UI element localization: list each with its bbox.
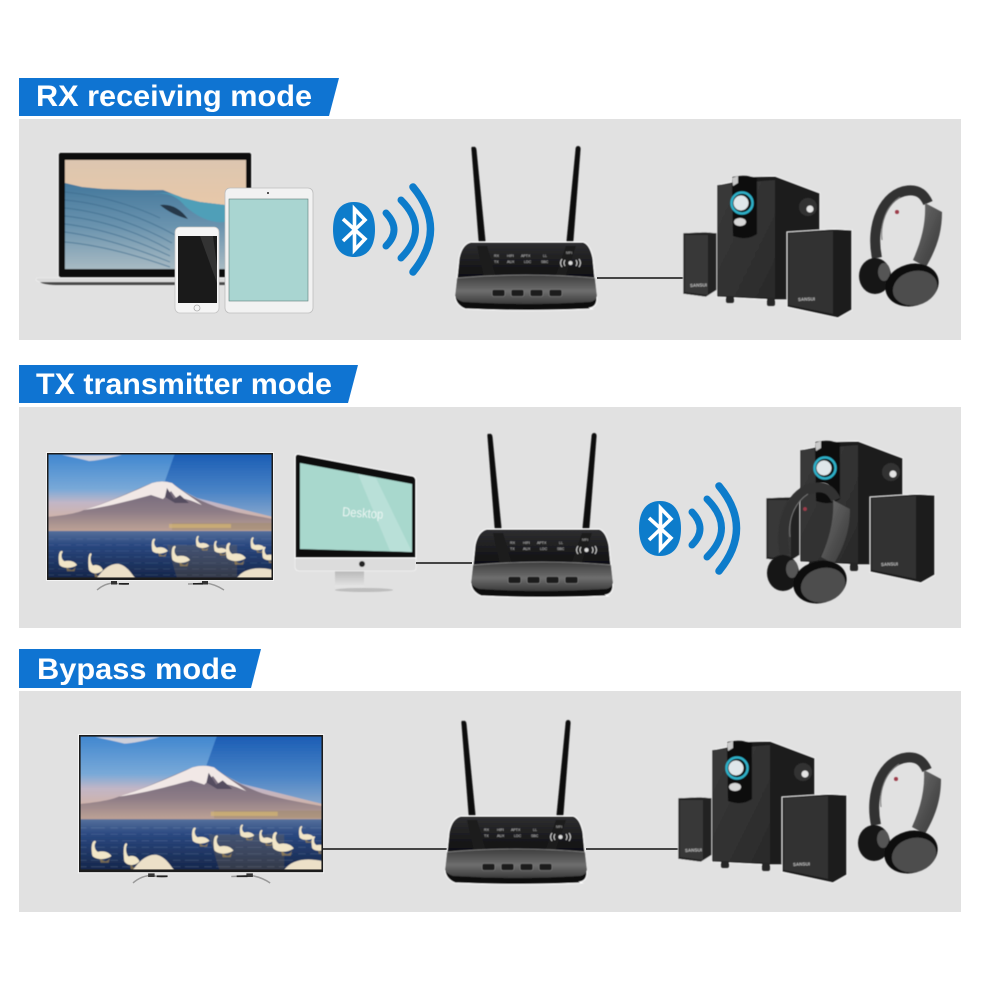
- icon: speakers: [683, 176, 852, 318]
- icon: speakers: SANSUI: [793, 861, 810, 867]
- icon: bluetooth waves: [639, 486, 736, 571]
- icon: bluetooth adapter: TX: [494, 260, 499, 264]
- icon: bluetooth adapter: SBC: [541, 260, 549, 264]
- icon: desktop computer: Desktop: [342, 504, 384, 522]
- cable: adapter to speakers: [597, 277, 684, 279]
- icon: bluetooth adapter: [445, 720, 587, 884]
- icon: bluetooth adapter: [455, 146, 597, 310]
- icon: speakers: SANSUI: [881, 561, 898, 567]
- icon: bluetooth adapter: MFi: [566, 251, 572, 255]
- icon: bluetooth adapter: APTX: [521, 254, 531, 258]
- icon: bluetooth adapter: RX: [494, 254, 500, 258]
- icon: bluetooth adapter: HIFI: [507, 254, 514, 258]
- heading: TX transmitter mode: TX transmitter mode: [36, 368, 332, 401]
- icon: headphones: [767, 487, 852, 609]
- icon: tablet: [225, 188, 313, 313]
- icon: bluetooth adapter: LL: [533, 828, 537, 832]
- icon: speakers: SANSUI: [690, 282, 707, 288]
- icon: bluetooth adapter: LL: [559, 541, 563, 545]
- icon: bluetooth adapter: RX: [510, 541, 516, 545]
- cable: adapter to speakers: [586, 848, 680, 850]
- heading: Bypass mode: Bypass mode: [37, 653, 237, 686]
- icon: bluetooth adapter: LDC: [540, 547, 548, 551]
- icon: bluetooth adapter: LDC: [514, 834, 522, 838]
- panel: TX transmitter mode: [19, 365, 961, 628]
- icon: bluetooth adapter: AUX: [507, 260, 515, 264]
- icon: bluetooth adapter: APTX: [537, 541, 547, 545]
- icon: bluetooth adapter: LL: [543, 254, 547, 258]
- heading: RX receiving mode: RX receiving mode: [36, 80, 312, 113]
- icon: phone: [175, 227, 219, 313]
- icon: speakers: [678, 741, 847, 883]
- panel: Bypass mode: [19, 649, 961, 912]
- icon: television: [46, 452, 277, 590]
- icon: bluetooth adapter: HIFI: [523, 541, 530, 545]
- icon: speakers: SANSUI: [685, 847, 702, 853]
- icon: bluetooth adapter: MFi: [582, 538, 588, 542]
- cable: television to adapter: [323, 848, 447, 850]
- icon: desktop computer: [295, 454, 416, 592]
- icon: bluetooth adapter: MFi: [556, 825, 562, 829]
- icon: bluetooth adapter: TX: [510, 547, 515, 551]
- icon: bluetooth adapter: SBC: [557, 547, 565, 551]
- icon: bluetooth adapter: TX: [484, 834, 489, 838]
- icon: bluetooth adapter: APTX: [511, 828, 521, 832]
- icon: laptop: [36, 152, 252, 285]
- icon: bluetooth adapter: SBC: [531, 834, 539, 838]
- icon: headphones: [859, 190, 944, 312]
- icon: speakers: [766, 441, 935, 583]
- icon: speakers: SANSUI: [798, 296, 815, 302]
- icon: bluetooth adapter: [471, 433, 613, 598]
- cable: computer to adapter: [416, 562, 472, 564]
- icon: bluetooth adapter: HIFI: [497, 828, 504, 832]
- icon: bluetooth adapter: LDC: [524, 260, 532, 264]
- icon: bluetooth waves: [333, 187, 430, 272]
- icon: bluetooth adapter: AUX: [523, 547, 531, 551]
- icon: headphones: [858, 757, 943, 879]
- icon: bluetooth adapter: RX: [484, 828, 490, 832]
- icon: bluetooth adapter: AUX: [497, 834, 505, 838]
- icon: television: [78, 734, 327, 883]
- heading: Bypass mode: [19, 649, 261, 688]
- panel: RX receiving mode: [19, 78, 961, 340]
